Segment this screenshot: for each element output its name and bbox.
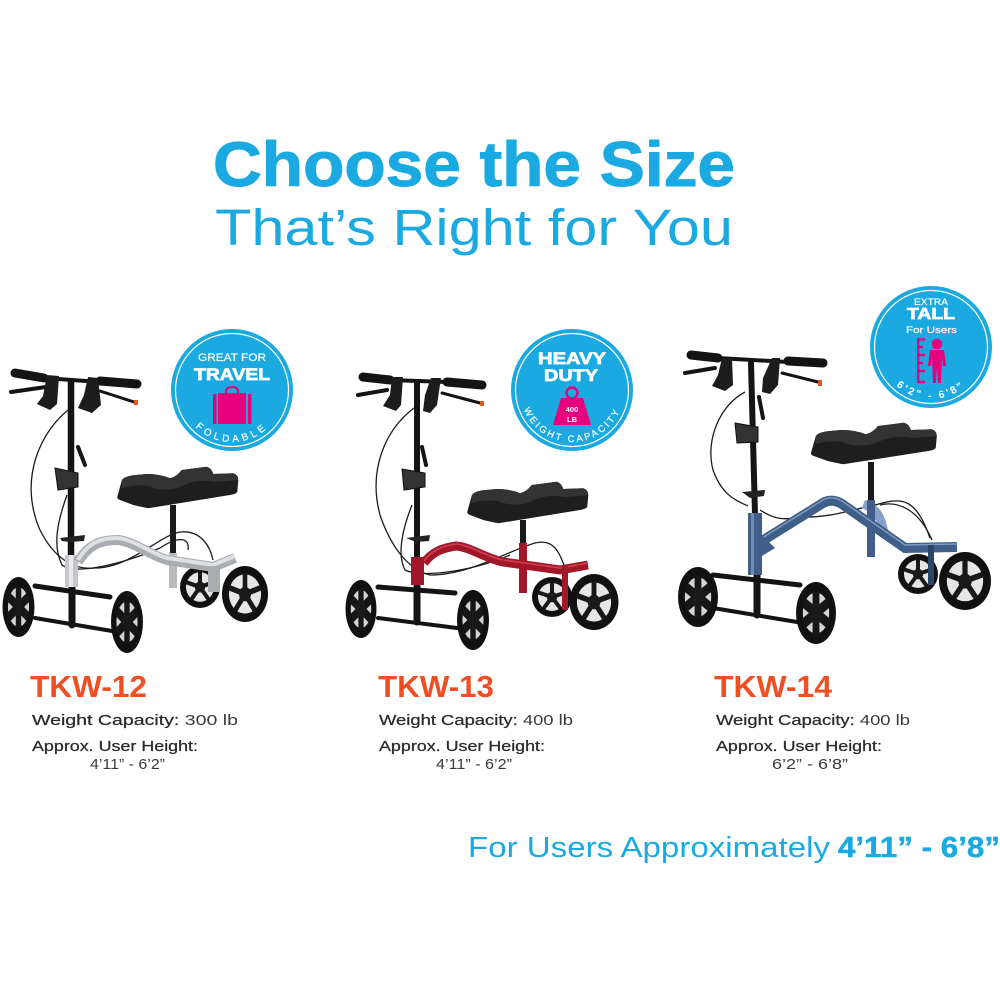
walker: TKW-13 red knee scooter (346, 377, 618, 650)
specs: TKW-12: TKW-12 (30, 669, 147, 704)
specs: TKW-13: Approx. User Height: (379, 738, 545, 755)
badge: great for travel: TRAVEL (194, 366, 270, 384)
title (213, 130, 735, 256)
badge: extra tall: TALL (907, 306, 955, 323)
specs: TKW-13 (378, 669, 573, 773)
specs: TKW-12: 4’11” - 6’2” (90, 756, 165, 773)
icon: pink weight: 400 (566, 405, 578, 414)
walker: TKW-14 blue knee scooter (678, 355, 991, 644)
badge: heavy duty: HEAVY (538, 350, 606, 368)
icon: pink suitcase (213, 387, 252, 424)
footer: overall height range: 4’11” - 6’8” (838, 832, 1000, 864)
walker: TKW-12 silver knee scooter (2, 373, 268, 653)
icon: pink weight: LB (567, 415, 578, 424)
badge: extra tall: For Users (906, 325, 957, 336)
specs: TKW-14: TKW-14 (714, 669, 833, 704)
icon: person (928, 339, 946, 383)
badge: great for travel: GREAT FOR (198, 352, 266, 364)
badge: extra tall: EXTRA (914, 297, 948, 307)
badge: extra tall (870, 286, 992, 408)
specs: TKW-12: Approx. User Height: (32, 738, 198, 755)
badge: heavy duty (511, 329, 633, 451)
badge: heavy duty: WEIGHT CAPACITY (524, 406, 618, 442)
specs: TKW-14 (714, 669, 910, 773)
specs: TKW-12: Weight Capacity: 300 lb (32, 712, 238, 729)
footer: overall height range (468, 832, 1000, 864)
icon: pink weight (553, 388, 591, 425)
badge: great for travel (171, 329, 293, 451)
badge: extra tall: 6'2" - 6'8" (897, 381, 960, 398)
badge: heavy duty: DUTY (544, 367, 598, 385)
footer: overall height range: For Users Approximately (468, 832, 831, 864)
specs: TKW-12 (30, 669, 238, 773)
specs: TKW-13: 4’11” - 6’2” (436, 756, 512, 773)
badge: great for travel: FOLDABLE (196, 422, 266, 442)
specs: TKW-13: Weight Capacity: 400 lb (379, 712, 573, 729)
title: Choose the Size (213, 130, 735, 200)
specs: TKW-13: TKW-13 (378, 669, 494, 704)
specs: TKW-14: 6’2” - 6’8” (772, 756, 848, 773)
icon: ruler (917, 339, 925, 383)
specs: TKW-14: Approx. User Height: (716, 738, 882, 755)
title: That’s Right for You (215, 199, 733, 256)
specs: TKW-14: Weight Capacity: 400 lb (716, 712, 910, 729)
